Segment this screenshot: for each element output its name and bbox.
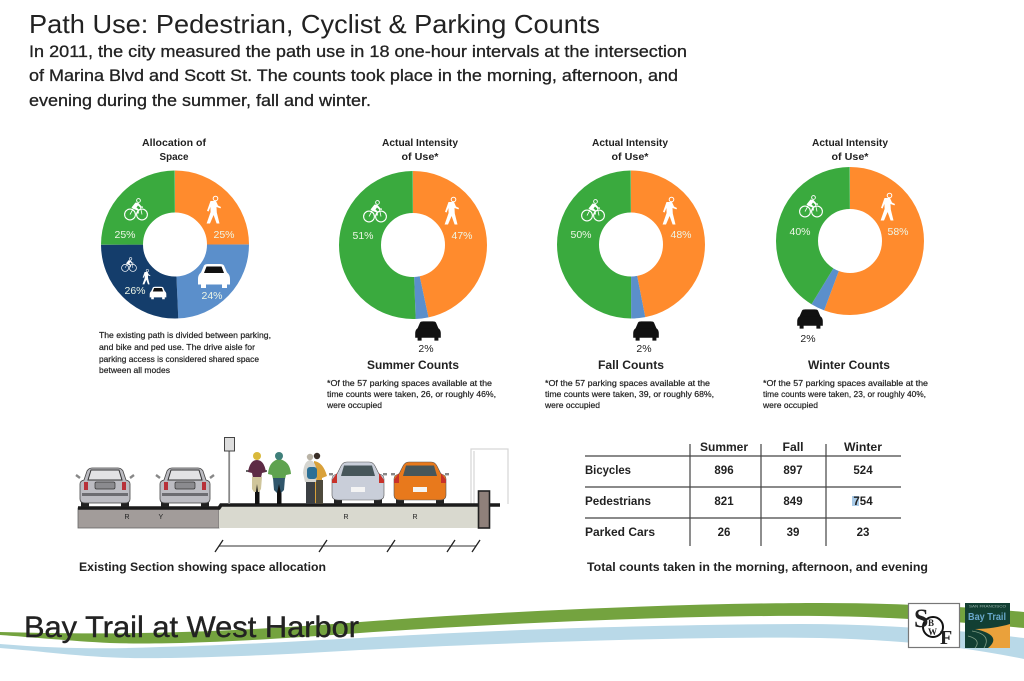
percent labels: 48% [670,229,692,241]
chart heading [382,137,458,163]
parking note: were occupied [762,400,818,410]
logo: SWF: B [928,618,934,628]
row: bicycles: Bicycles [585,465,631,477]
logo: SWF: S [914,604,928,633]
lane letters: Y [158,514,164,521]
table: total counts [585,442,928,574]
cyclist: maroon jacket [246,452,267,504]
season heading: Winter Counts [808,358,890,372]
percent labels [789,226,909,238]
parking note: time counts were taken, 26, or roughly 46%, [327,389,496,399]
ground line [78,505,500,508]
cyclist: green jacket [268,452,291,504]
intro text: evening during the summer, fall and winter. [29,91,371,110]
chart heading: Allocation of [142,137,206,149]
row: bicycles: 524 [853,465,873,477]
parked car: silver [329,462,387,504]
logo: Bay Trail: Bay Trail [968,611,1006,623]
title: Path Use: Pedestrian, Cyclist & Parking Counts [29,9,600,39]
roadway [78,508,219,528]
icon: parked car [633,321,659,341]
icon: parked car [797,309,823,329]
row: pedestrians: Pedestrians [585,496,651,508]
icon: pedestrian [445,197,459,224]
percent labels: 40% [789,226,811,238]
chart heading [812,137,888,163]
icon: cyclist [364,201,386,222]
parking note [544,378,714,410]
chart heading [592,137,668,163]
seawall post [478,491,490,528]
donut chart: fall [578,192,684,298]
percent labels [114,229,235,302]
icon: parked car [415,321,441,341]
icon: pedestrian [881,193,895,220]
blue wave [0,624,1024,659]
row: pedestrians: 821 [714,496,734,508]
column headers: Summer [700,442,749,454]
parked car: second [156,468,214,507]
donut chart: allocation [122,192,228,298]
parking note: *Of the 57 parking spaces available at the [327,378,492,388]
intro text: of Marina Blvd and Scott St. The counts took place in the morning, afternoon, and [29,66,678,85]
row: bicycles: 896 [714,465,734,477]
chart heading: of Use* [612,151,649,163]
parking note: *Of the 57 parking spaces available at the [763,378,928,388]
percent labels [352,230,473,242]
parking note [326,378,496,410]
allocation note [99,330,271,375]
building outline [471,449,508,504]
panel: allocation of space [99,137,271,375]
logo: SWF [908,604,960,649]
sign post [224,438,234,504]
sidewalk [219,505,478,528]
logo: Bay Trail [965,603,1010,648]
intro text [29,42,687,110]
column headers: Winter [844,442,883,454]
parked car: left [76,468,134,507]
footer title: Bay Trail at West Harbor [24,611,359,644]
dimension line [215,540,480,552]
donut chart: summer [360,192,466,298]
chart heading: Actual Intensity [382,137,458,149]
table caption: Total counts taken in the morning, afternoon, and evening [587,560,928,574]
panel: winter counts [762,137,928,410]
icon: cyclist [125,199,147,220]
row: parked cars: 23 [857,527,869,539]
chart heading: of Use* [402,151,439,163]
percent labels: 50% [570,229,592,241]
panel: fall counts [544,137,714,410]
section caption: Existing Section showing space allocation [79,560,326,574]
percent labels: 58% [887,226,909,238]
highlighted digit [852,496,859,506]
icon: small pedestrian [142,269,150,284]
icon: pedestrian [663,197,677,224]
lane letters: R [124,514,130,521]
donut chart: winter [797,188,903,294]
icon: small car [150,287,166,299]
row: pedestrians [585,496,873,508]
row: bicycles [585,465,873,477]
row: parked cars: 26 [718,527,730,539]
season heading: Fall Counts [598,358,664,372]
row: parked cars: Parked Cars [585,527,655,539]
parking note: time counts were taken, 39, or roughly 68%, [545,389,714,399]
parking percent: 2% [800,333,816,345]
logo: Bay Trail: SAN FRANCISCO [969,604,1006,608]
percent labels [570,229,692,241]
row: parked cars [585,527,869,539]
allocation note: parking access is considered shared space [99,354,259,364]
season heading: Summer Counts [367,358,459,372]
panel: street section illustration [76,438,508,574]
green wave [0,603,1024,644]
logo: SWF: W [928,627,937,637]
parking note: time counts were taken, 23, or roughly 40%, [763,389,926,399]
table grid [585,444,901,546]
logo: SWF: F [940,627,952,649]
row: pedestrians: 849 [783,496,803,508]
percent labels: 51% [352,230,374,242]
parking note [762,378,928,410]
footer banner [0,603,1024,659]
parked car: orange [391,462,449,504]
percent labels: 47% [451,230,473,242]
chart heading: Space [160,151,189,163]
lane letters: R [412,514,418,521]
parking percent: 2% [418,343,434,355]
parking note: *Of the 57 parking spaces available at the [545,378,710,388]
icon: cyclist [582,200,604,221]
chart heading [142,137,206,163]
percent labels: 26% [124,285,146,297]
lane letters: R [344,514,349,521]
icon: cyclist [800,196,822,217]
row: parked cars: 39 [787,527,799,539]
intro text: In 2011, the city measured the path use in 18 one-hour intervals at the intersection [29,42,687,61]
icon: small cyclist [122,258,136,271]
percent labels: 25% [213,229,235,241]
icon: pedestrian [207,196,221,224]
lane letters [124,514,418,521]
row: pedestrians: 754 [853,496,873,508]
panel: summer counts [326,137,496,410]
row: bicycles: 897 [783,465,803,477]
allocation note: and bike and ped use. The drive aisle for [99,342,255,352]
chart heading: Actual Intensity [812,137,888,149]
column headers [700,442,883,454]
column headers: Fall [782,442,804,454]
icon: car [198,264,230,288]
chart heading: Actual Intensity [592,137,668,149]
chart heading: of Use* [832,151,869,163]
pedestrians [303,453,327,504]
percent labels: 25% [114,229,136,241]
parking note: were occupied [544,400,600,410]
allocation note: The existing path is divided between parking, [99,330,271,340]
allocation note: between all modes [99,365,170,375]
parking note: were occupied [326,400,382,410]
percent labels: 24% [201,290,223,302]
parking percent: 2% [636,343,652,355]
